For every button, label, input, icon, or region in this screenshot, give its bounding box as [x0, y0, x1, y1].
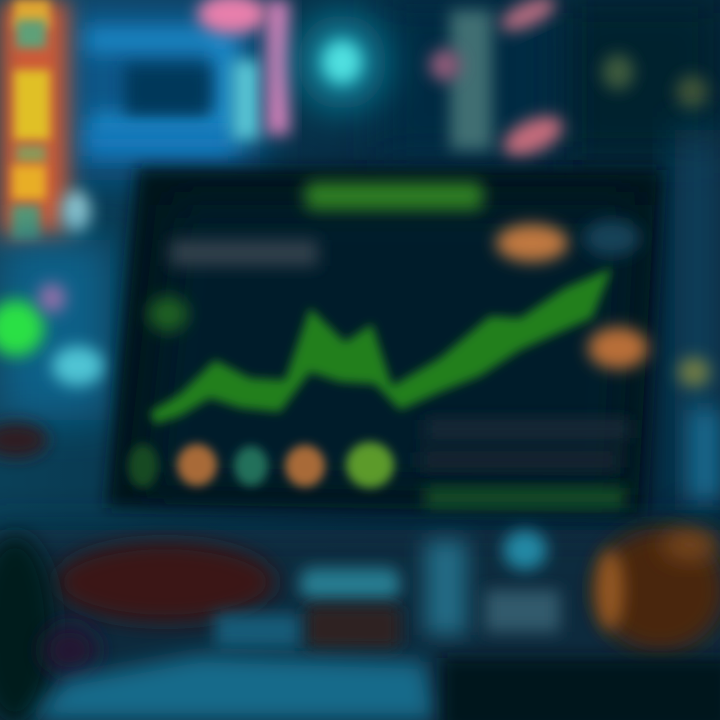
- panel: left glow lights: [0, 240, 110, 458]
- text block: green footer row: [425, 488, 625, 508]
- panel: keyboard and desk foreground: [0, 528, 720, 720]
- text block: grey table rows: [420, 420, 630, 468]
- panel: dark monitor: [106, 168, 662, 518]
- text block: grey label: [170, 240, 318, 266]
- panel: right side glow: [675, 130, 720, 510]
- icon: orange marker: [588, 327, 648, 369]
- chart: green area line: [150, 268, 612, 424]
- heading: green title bar: [305, 182, 483, 210]
- panel: colourful tower on the left: [0, 0, 91, 240]
- icon: orange badge: [496, 224, 568, 262]
- panel: neon city backdrop: [60, 0, 720, 180]
- legend: indicator dots: [128, 442, 394, 488]
- icon: blue badge: [584, 220, 640, 256]
- icon: green square: [148, 296, 188, 332]
